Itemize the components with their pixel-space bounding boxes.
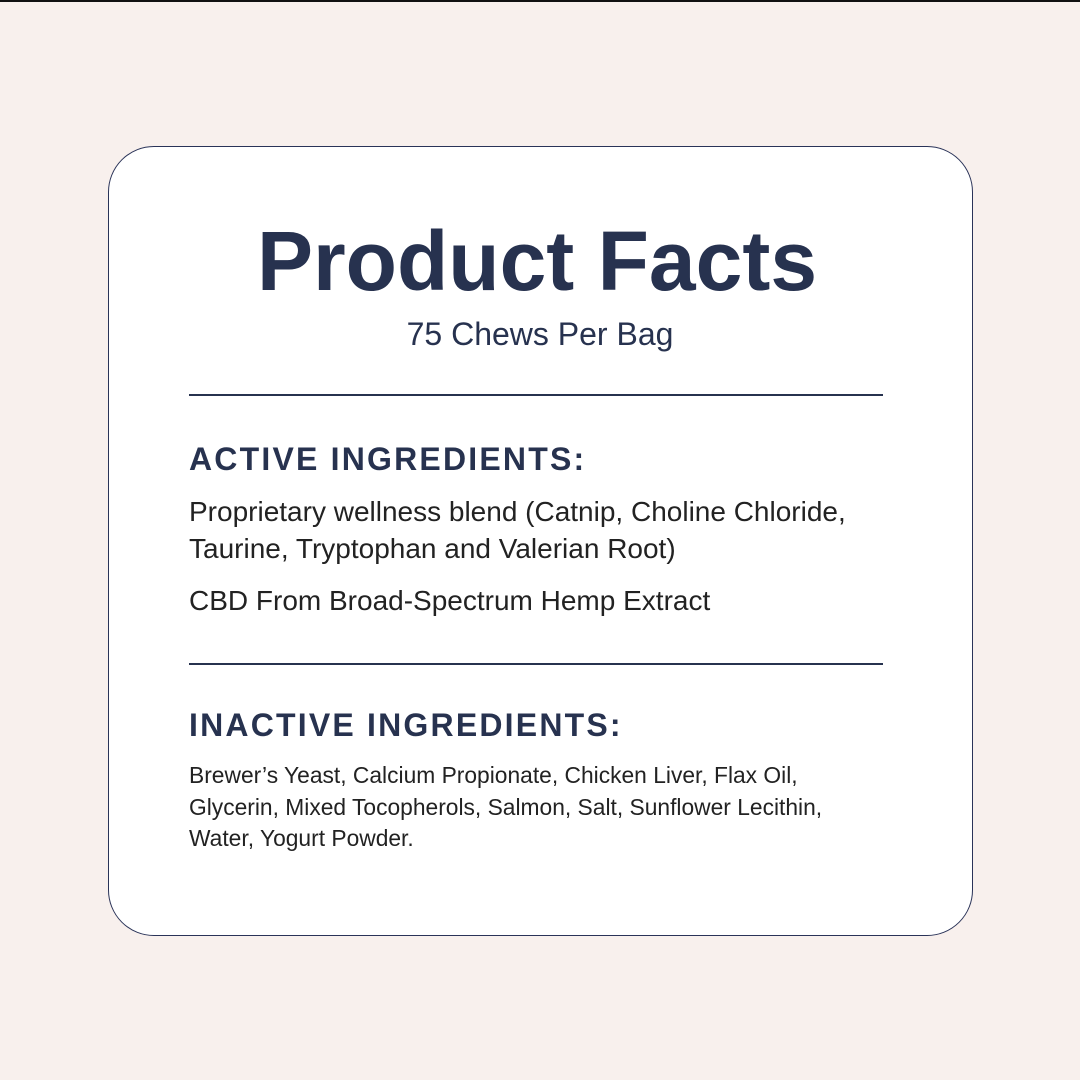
title: Product Facts [257, 214, 817, 308]
text block: active ingredients: Proprietary wellness blend (Catnip, Choline Chloride, [189, 496, 846, 527]
panel: product facts card [108, 146, 973, 936]
text block: active ingredients: Taurine, Tryptophan and Valerian Root) [189, 533, 676, 564]
subtitle: 75 Chews Per Bag [407, 316, 673, 352]
text block: inactive ingredients: Water, Yogurt Powder. [189, 825, 414, 851]
heading: active ingredients: ACTIVE INGREDIENTS: [189, 441, 586, 477]
text block: inactive ingredients: Glycerin, Mixed Tocopherols, Salmon, Salt, Sunflower Lecithin, [189, 794, 822, 820]
text block: CBD: CBD From Broad-Spectrum Hemp Extract [189, 585, 710, 616]
text block: inactive ingredients: Brewer’s Yeast, Calcium Propionate, Chicken Liver, Flax Oil, [189, 762, 798, 788]
text block: inactive ingredients [189, 762, 822, 851]
text block: active ingredients [189, 496, 846, 564]
heading: inactive ingredients: INACTIVE INGREDIENTS: [189, 707, 623, 743]
